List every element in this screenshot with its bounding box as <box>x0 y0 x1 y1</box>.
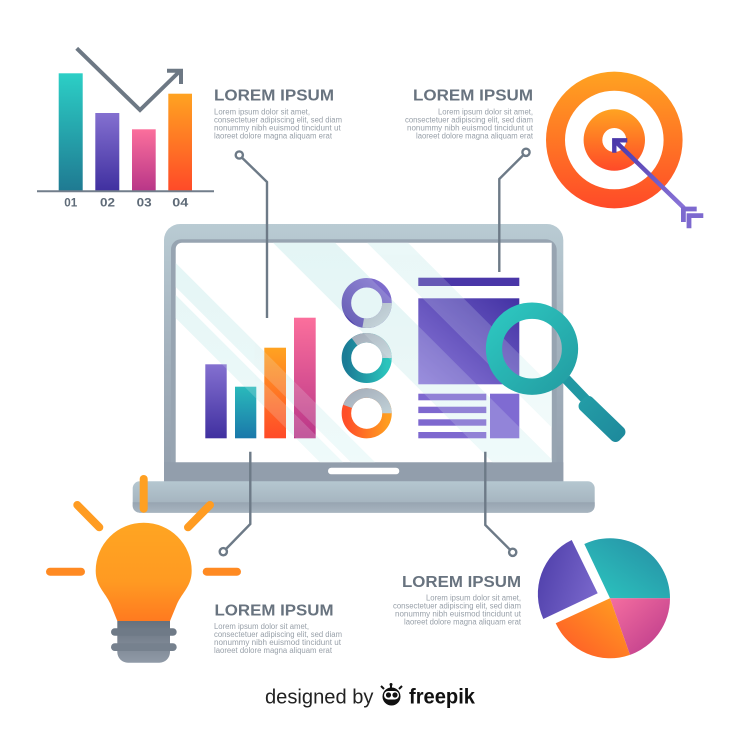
connector: top right <box>499 149 530 272</box>
donut 3 <box>346 393 387 434</box>
icon: magnifying glass <box>494 311 628 444</box>
trend arrow <box>77 48 181 110</box>
donut 2 <box>346 338 387 378</box>
magnifier shaft <box>566 379 588 402</box>
heading: LOREM IPSUM <box>214 88 334 104</box>
bar 03 <box>132 129 156 191</box>
heading: LOREM IPSUM <box>413 88 533 104</box>
text block: bottom left <box>214 602 342 655</box>
chin <box>164 462 563 482</box>
laptop lid <box>164 224 563 482</box>
screen bar chart <box>205 318 316 438</box>
pie slice: pink <box>610 598 670 655</box>
baseline axis <box>37 190 214 192</box>
body copy: Lorem ipsum dolor sit amet, <box>438 107 533 116</box>
body copy: Lorem ipsum dolor sit amet, <box>214 107 310 116</box>
screen donut charts <box>346 283 387 434</box>
connector: top left <box>236 151 267 318</box>
body copy: laoreet dolore magna aliquam erat <box>214 646 333 655</box>
screw ring 2 <box>111 643 177 651</box>
screen <box>176 243 552 462</box>
text block: top right <box>405 88 534 140</box>
magnifier ring <box>494 311 570 387</box>
axis label 02: 02 <box>100 196 115 210</box>
body copy: nonummy nibh euismod tincidunt ut <box>395 609 522 618</box>
icon: freepik mascot <box>381 683 402 706</box>
body copy: Lorem ipsum dolor sit amet, <box>426 593 521 602</box>
bar 02 <box>95 113 119 191</box>
axis label 03: 03 <box>137 196 152 210</box>
arrow fletching <box>683 209 703 228</box>
base lower band <box>133 502 595 513</box>
footer credit <box>265 683 475 708</box>
icon: light bulb <box>50 479 237 663</box>
document thumbnail <box>490 394 519 438</box>
freepik wordmark: freepik <box>409 685 475 708</box>
body copy: laoreet dolore magna aliquam erat <box>214 131 333 140</box>
document image <box>418 298 519 384</box>
screw ring 1 <box>111 628 177 636</box>
bulb screw base <box>117 621 170 663</box>
body copy <box>405 107 534 140</box>
connector: bottom left <box>220 452 250 555</box>
laptop <box>133 224 595 513</box>
arrow shaft and head <box>614 140 684 208</box>
body copy <box>393 593 522 626</box>
icon: target with arrow <box>546 72 703 228</box>
designed by: designed by <box>265 686 374 708</box>
bar chart with trend arrow <box>37 48 214 210</box>
body copy: nonummy nibh euismod tincidunt ut <box>407 123 534 132</box>
connector: bottom right <box>485 452 516 556</box>
screen document layout <box>418 278 519 438</box>
screen glare stripes <box>176 243 552 462</box>
body copy <box>214 622 342 655</box>
body copy: nonummy nibh euismod tincidunt ut <box>214 123 341 132</box>
pie slice: orange <box>556 598 630 658</box>
body copy: consectetuer adipiscing elit, sed diam <box>393 601 521 610</box>
text block: bottom right <box>393 574 522 626</box>
heading: LOREM IPSUM <box>402 574 521 591</box>
screen bar 3 <box>264 348 286 438</box>
target centre <box>584 109 645 171</box>
light rays <box>50 479 237 572</box>
body copy: consectetuer adipiscing elit, sed diam <box>405 115 533 124</box>
body copy: consectetuer adipiscing elit, sed diam <box>214 115 342 124</box>
bar 01 <box>59 73 83 191</box>
screen bar 1 <box>205 364 227 438</box>
text block: top left <box>214 88 342 140</box>
screen bar 2 <box>235 387 256 438</box>
bulb glass <box>96 523 192 621</box>
magnifier handle <box>576 394 628 444</box>
pie chart <box>538 538 670 658</box>
document title bar <box>418 278 519 286</box>
body copy: laoreet dolore magna aliquam erat <box>416 131 534 140</box>
body copy: Lorem ipsum dolor sit amet, <box>214 622 309 631</box>
axis label 01: 01 <box>64 196 78 210</box>
bar 04 <box>168 94 192 191</box>
inner bezel <box>171 239 557 462</box>
base <box>133 481 595 513</box>
body copy <box>214 107 342 140</box>
pie slice: purple, pulled out <box>538 540 598 619</box>
screen bar 4 <box>294 318 316 438</box>
document text lines <box>418 394 486 438</box>
pie slice: teal <box>584 538 670 598</box>
body copy: consectetuer adipiscing elit, sed diam <box>214 630 342 639</box>
heading: LOREM IPSUM <box>214 602 334 620</box>
body copy: nonummy nibh euismod tincidunt ut <box>214 638 342 647</box>
axis label 04: 04 <box>172 196 189 210</box>
body copy: laoreet dolore magna aliquam erat <box>404 617 522 626</box>
glare overlay on screen content <box>222 278 520 438</box>
trackpad slot <box>328 468 399 474</box>
target rings <box>546 72 683 208</box>
donut 1 <box>346 283 387 323</box>
